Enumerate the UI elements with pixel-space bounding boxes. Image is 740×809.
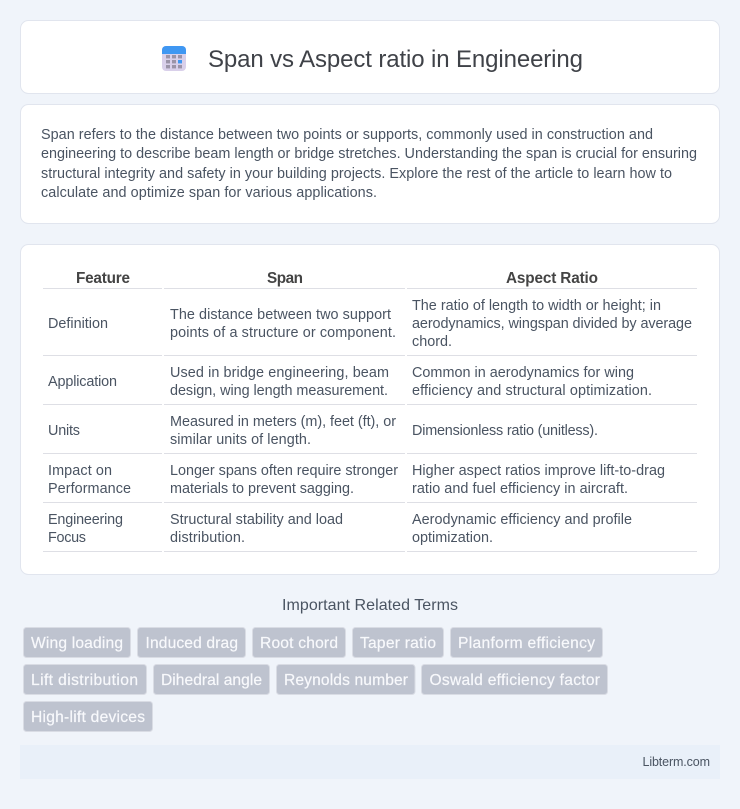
row: units (43, 414, 697, 454)
row: engineering focus: Aerodynamic efficiency and profile (412, 512, 632, 528)
panel: header (20, 20, 720, 94)
row: definition: The distance between two support (170, 307, 391, 323)
tag: lift distribution: Lift distribution (31, 672, 138, 689)
tag: reynolds number: Reynolds number (284, 672, 408, 689)
row: impact on performance: materials to prevent sagging. (170, 481, 354, 497)
row: engineering focus: optimization. (412, 530, 493, 546)
row: application: Common in aerodynamics for wing (412, 365, 634, 381)
row: application: design, wing length measurement. (170, 383, 388, 399)
intro text (41, 127, 697, 201)
tag: taper ratio (352, 628, 444, 658)
tag: dihedral angle (154, 664, 270, 694)
row: engineering focus (43, 512, 697, 552)
row: impact on performance: Longer spans often require stronger (170, 463, 398, 479)
table header: Feature (76, 270, 130, 287)
row: definition: aerodynamics, wingspan divided by average (412, 316, 692, 332)
row: engineering focus: Engineering (48, 512, 123, 528)
row: engineering focus: Focus (48, 530, 86, 546)
tag: planform efficiency (450, 628, 602, 658)
heading: important related terms: Important Related Terms (282, 597, 458, 614)
tag: dihedral angle: Dihedral angle (161, 672, 262, 689)
row: application: Application (48, 374, 117, 390)
table header: Aspect Ratio (506, 270, 598, 287)
panel: comparison table (20, 244, 720, 574)
row: application: efficiency and structural optimization. (412, 383, 652, 399)
row: definition: Definition (48, 316, 108, 332)
footer: Libterm.com (642, 755, 710, 769)
tag: reynolds number (276, 664, 415, 694)
row: impact on performance: Performance (48, 481, 131, 497)
tag: induced drag (138, 628, 246, 658)
tag: oswald efficiency factor: Oswald efficiency factor (430, 672, 600, 689)
row: units: Units (48, 423, 80, 439)
tag: planform efficiency: Planform efficiency (458, 635, 595, 652)
intro text: calculate and optimize span for various applications. (41, 185, 377, 201)
row: impact on performance: ratio and fuel efficiency in aircraft. (412, 481, 628, 497)
row: impact on performance: Higher aspect ratios improve lift-to-drag (412, 463, 665, 479)
tag: oswald efficiency factor (422, 664, 608, 694)
tag: high-lift devices (24, 702, 152, 732)
intro text: Span refers to the distance between two points or supports, commonly used in construction and (41, 127, 653, 143)
row: definition (43, 298, 697, 356)
panel: intro (20, 104, 720, 224)
tag: root chord (252, 628, 346, 658)
tag: high-lift devices: High-lift devices (31, 709, 145, 726)
tag: wing loading (24, 628, 130, 658)
row: impact on performance (43, 463, 697, 503)
row: application (43, 365, 697, 405)
panel: related term tags (24, 628, 608, 732)
row: application: Used in bridge engineering, beam (170, 365, 389, 381)
row: definition: chord. (412, 334, 452, 350)
tag: taper ratio: Taper ratio (360, 635, 436, 652)
tag: lift distribution (24, 664, 146, 694)
row: engineering focus: distribution. (170, 530, 245, 546)
row: units: Measured in meters (m), feet (ft), or (170, 414, 396, 430)
row: impact on performance: Impact on (48, 463, 112, 479)
table header (43, 270, 697, 289)
footer (20, 745, 720, 779)
row: definition: points of a structure or component. (170, 325, 396, 341)
intro text: structural integrity and safety in your building projects. Explore the rest of the article to learn how to (41, 166, 672, 182)
tag: wing loading: Wing loading (31, 635, 123, 652)
table header: Span (267, 270, 303, 287)
title: Span vs Aspect ratio in Engineering (208, 46, 583, 73)
tag: root chord: Root chord (260, 635, 338, 652)
tag: induced drag: Induced drag (146, 635, 238, 652)
intro text: engineering to describe beam length or bridge stretches. Understanding the span is crucial for ensuring (41, 146, 697, 162)
row: engineering focus: Structural stability and load (170, 512, 343, 528)
row: units: similar units of length. (170, 432, 311, 448)
icon: calendar (162, 46, 186, 71)
row: units: Dimensionless ratio (unitless). (412, 423, 598, 439)
row: definition: The ratio of length to width or height; in (412, 298, 661, 314)
